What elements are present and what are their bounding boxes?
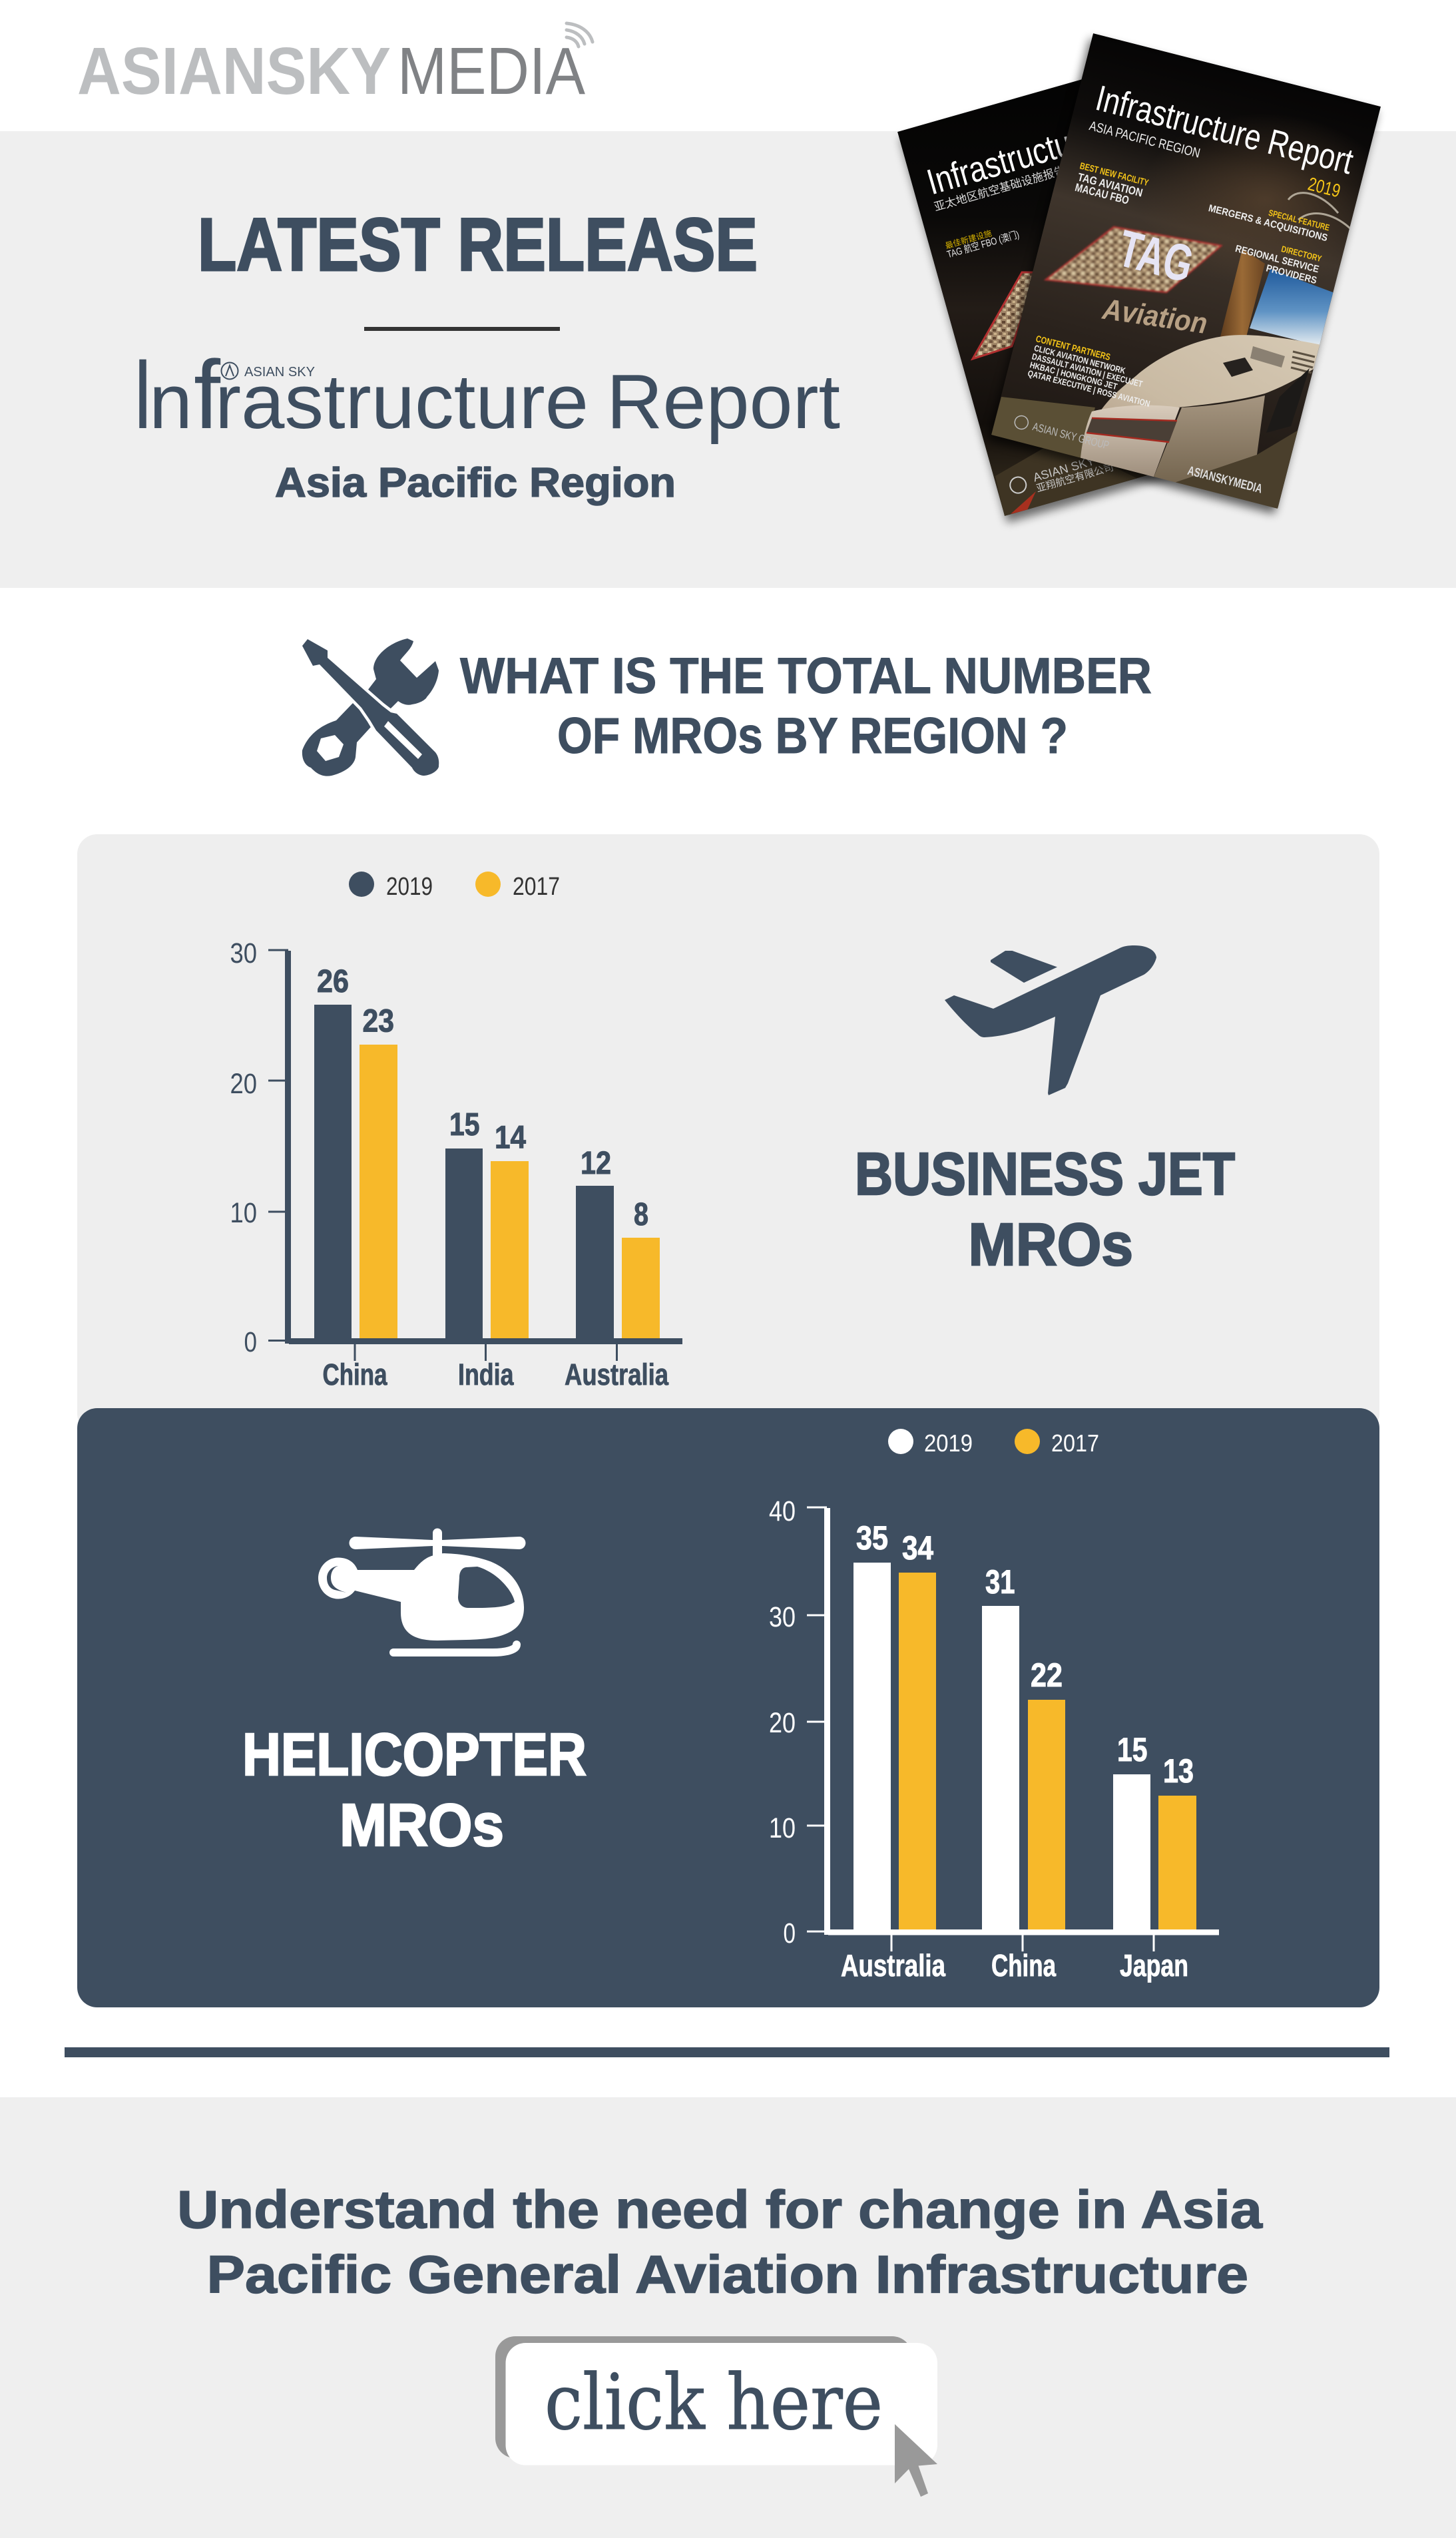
back cover (Chinese edition): 最佳新建设施 — [944, 227, 993, 251]
report logotype: n — [149, 358, 192, 445]
report logotype: ASIAN SKY — [244, 365, 315, 380]
logo: Asian Sky Media: ASIANSKY — [77, 34, 391, 109]
rule under heading — [364, 327, 560, 331]
report logotype: rastructure — [215, 358, 589, 445]
front cover (2019 edition) — [988, 33, 1391, 514]
back cover (Chinese edition): ASIAN SKY GROUP — [1031, 441, 1141, 484]
button: click here: click here — [545, 2358, 883, 2447]
call to action text — [177, 2180, 1263, 2304]
photo: floor — [991, 397, 1095, 458]
bar chart: helicopter MROs by country — [769, 1495, 1219, 1983]
bar chart: helicopter MROs by country: 15 — [1117, 1731, 1148, 1768]
bar chart: business jet MROs by country: 30 — [230, 937, 257, 969]
bar chart: helicopter MROs by country: 30 — [769, 1601, 796, 1633]
label: business jet MROs — [855, 1141, 1235, 1278]
front cover (2019 edition): Infrastructure Report — [1092, 78, 1357, 182]
icon: wrench and screwdriver — [302, 638, 439, 776]
divider bar — [65, 2047, 1389, 2057]
bar chart: business jet MROs by country: 12 — [581, 1146, 611, 1181]
bar chart: business jet MROs by country: 15 — [449, 1107, 479, 1142]
front cover (2019 edition): HKBAC | HONGKONG JET — [1029, 360, 1118, 391]
report logotype: f — [194, 340, 220, 449]
label: business jet MROs: MROs — [968, 1212, 1133, 1278]
bar chart: business jet MROs by country: 8 — [634, 1197, 648, 1232]
back cover (Chinese edition): TAG 航空 FBO (澳门) — [946, 229, 1021, 260]
bar chart: helicopter MROs by country: 35 — [856, 1519, 888, 1557]
bar chart: business jet MROs by country: 26 — [317, 964, 349, 999]
bar chart: helicopter MROs by country: China — [991, 1948, 1056, 1983]
label: helicopter MROs — [242, 1722, 587, 1859]
legend: helicopter chart — [888, 1429, 1099, 1457]
photo: reception desk — [1080, 335, 1322, 482]
front cover (2019 edition): CONTENT PARTNERS — [1035, 333, 1112, 362]
icon: airplane — [945, 945, 1156, 1095]
button: click here — [495, 2336, 937, 2465]
front cover (2019 edition): REGIONAL SERVICE — [1234, 243, 1320, 275]
front cover (2019 edition): DIRECTORY — [1280, 244, 1323, 264]
panel: business jet MROs — [77, 834, 1379, 1433]
legend: helicopter chart: 2019 — [924, 1429, 973, 1457]
icon: helicopter — [318, 1529, 526, 1652]
bar chart: business jet MROs by country: China — [322, 1358, 387, 1392]
back cover (Chinese edition): 亚翔航空有限公司 — [1035, 460, 1115, 495]
photo: ceiling glow — [1169, 125, 1365, 249]
bar chart: helicopter MROs by country: 40 — [769, 1495, 796, 1527]
bar chart: business jet MROs by country: 23 — [362, 1004, 394, 1039]
bar chart: business jet MROs by country: Australia — [565, 1358, 669, 1392]
icon: mouse cursor — [895, 2424, 937, 2497]
front cover (2019 edition): QATAR EXECUTIVE | ROSS AVIATION — [1027, 368, 1151, 409]
bar chart: helicopter MROs by country: 34 — [902, 1529, 933, 1567]
subtitle: Asia Pacific Region: Asia Pacific Region — [275, 460, 676, 506]
report logotype: Report — [607, 358, 840, 445]
front cover (2019 edition): 2019 — [1306, 173, 1343, 201]
logo: Asian Sky Media: MEDIA — [397, 34, 585, 109]
photo: TAG wing sign — [1046, 227, 1221, 292]
logo: Asian Sky Media — [77, 23, 593, 109]
bar chart: business jet MROs by country: 0 — [244, 1326, 257, 1358]
heading: latest release: LATEST RELEASE — [198, 203, 758, 286]
front cover (2019 edition): CLICK AVIATION NETWORK — [1033, 343, 1127, 376]
front cover (2019 edition): MERGERS & ACQUISITIONS — [1207, 202, 1329, 244]
bar chart: business jet MROs by country — [230, 937, 682, 1392]
front cover (2019 edition): BEST NEW FACILITY — [1079, 160, 1150, 188]
label: helicopter MROs: MROs — [340, 1792, 504, 1859]
header band — [0, 131, 1456, 588]
label: helicopter MROs: HELICOPTER — [242, 1722, 587, 1788]
bar chart: helicopter MROs by country: 22 — [1031, 1656, 1063, 1694]
call to action text: Understand the need for change in Asia — [177, 2180, 1263, 2239]
bar chart: business jet MROs by country: 20 — [230, 1068, 257, 1100]
bar chart: helicopter MROs by country: 20 — [769, 1707, 796, 1739]
panel: helicopter MROs — [77, 1408, 1379, 2007]
report logotype: I — [132, 338, 153, 449]
legend: business jet chart: 2019 — [386, 873, 433, 901]
front cover (2019 edition): TAG — [1112, 218, 1199, 294]
bar chart: helicopter MROs by country: Japan — [1120, 1948, 1188, 1983]
front cover (2019 edition): ASIAN SKY GROUP — [1031, 420, 1110, 452]
bar chart: helicopter MROs by country: 31 — [985, 1563, 1015, 1601]
back cover (Chinese edition): Infrastructure — [923, 116, 1101, 202]
bar chart: helicopter MROs by country: 0 — [783, 1917, 796, 1949]
front cover (2019 edition): TAG AVIATION — [1077, 170, 1144, 199]
front cover (2019 edition): MACAU FBO — [1074, 181, 1130, 207]
report logotype — [132, 338, 840, 449]
bar chart: business jet MROs by country: India — [458, 1358, 514, 1392]
bar chart: business jet MROs by country: 14 — [495, 1120, 526, 1156]
report covers image — [897, 33, 1391, 523]
front cover (2019 edition): DASSAULT AVIATION | EXECUJET — [1031, 352, 1144, 389]
front cover (2019 edition): PROVIDERS — [1265, 262, 1318, 286]
back cover (Chinese edition) — [895, 79, 1170, 527]
front cover (2019 edition): Aviation — [1100, 293, 1210, 340]
legend: business jet chart — [349, 872, 560, 901]
call to action text: Pacific General Aviation Infrastructure — [206, 2245, 1248, 2304]
legend: helicopter chart: 2017 — [1051, 1429, 1099, 1457]
bar chart: business jet MROs by country: 10 — [230, 1197, 257, 1229]
bar chart: helicopter MROs by country: 13 — [1163, 1752, 1194, 1790]
front cover (2019 edition): ASIANSKYMEDIA — [1186, 464, 1264, 497]
heading: total number of MROs by region: OF MROs BY REGION ? — [557, 708, 1068, 764]
footer band — [0, 2097, 1456, 2538]
label: business jet MROs: BUSINESS JET — [855, 1141, 1235, 1208]
heading: total number of MROs by region — [460, 648, 1152, 764]
photo: poster and column — [1250, 269, 1338, 346]
bar chart: helicopter MROs by country: 10 — [769, 1812, 796, 1844]
legend: business jet chart: 2017 — [513, 873, 560, 901]
front cover (2019 edition): ASIA PACIFIC REGION — [1088, 119, 1202, 161]
heading: total number of MROs by region: WHAT IS THE TOTAL NUMBER — [460, 648, 1152, 704]
bar chart: helicopter MROs by country: Australia — [841, 1948, 945, 1983]
front cover (2019 edition): SPECIAL FEATURE — [1268, 208, 1331, 233]
back cover (Chinese edition): 亚太地区航空基础设施报告 — [931, 160, 1067, 214]
